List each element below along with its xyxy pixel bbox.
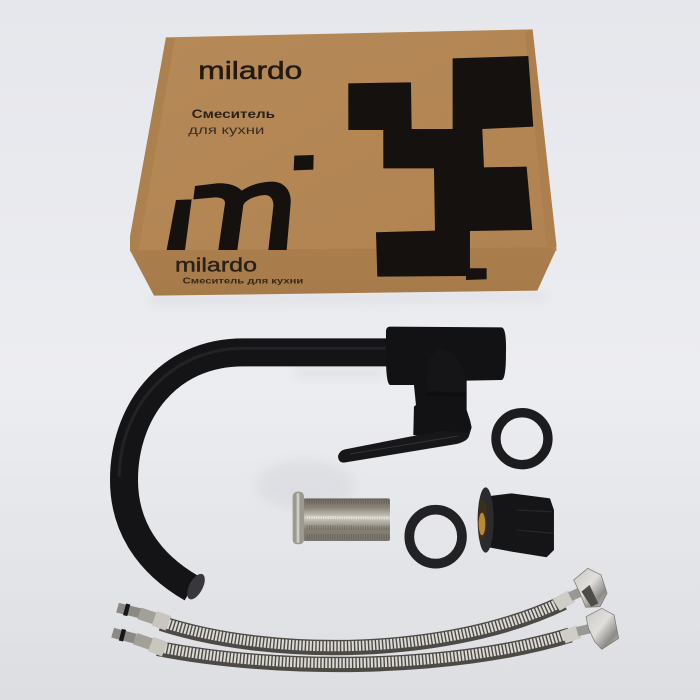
black mounting nut <box>478 487 554 557</box>
pixel dot <box>294 155 314 170</box>
black pixel pattern <box>348 56 533 280</box>
faucet spout <box>119 348 387 588</box>
front product label: Смеситель для кухни <box>183 275 303 285</box>
box right flap <box>525 29 557 247</box>
box front face <box>130 247 556 296</box>
faucet lever <box>338 431 469 463</box>
upper hose <box>118 568 607 648</box>
upper rubber gasket <box>496 413 548 465</box>
soft shadows on the surface <box>150 292 552 510</box>
box left flap <box>130 37 175 251</box>
brand wordmark on front: milardo <box>175 256 257 277</box>
faucet and fittings <box>119 327 554 602</box>
box top face <box>130 29 557 251</box>
product title: Смеситель <box>192 107 275 121</box>
cardboard box <box>130 29 557 296</box>
lower rubber gasket <box>409 510 462 564</box>
faucet body <box>386 327 506 440</box>
spout aerator <box>184 571 208 602</box>
brand wordmark on top: milardo <box>198 58 302 85</box>
large m logo <box>167 182 291 250</box>
lower hose <box>113 608 619 664</box>
braided supply hoses <box>113 568 619 664</box>
threaded steel tube <box>293 492 390 544</box>
product subtitle: для кухни <box>188 123 264 137</box>
